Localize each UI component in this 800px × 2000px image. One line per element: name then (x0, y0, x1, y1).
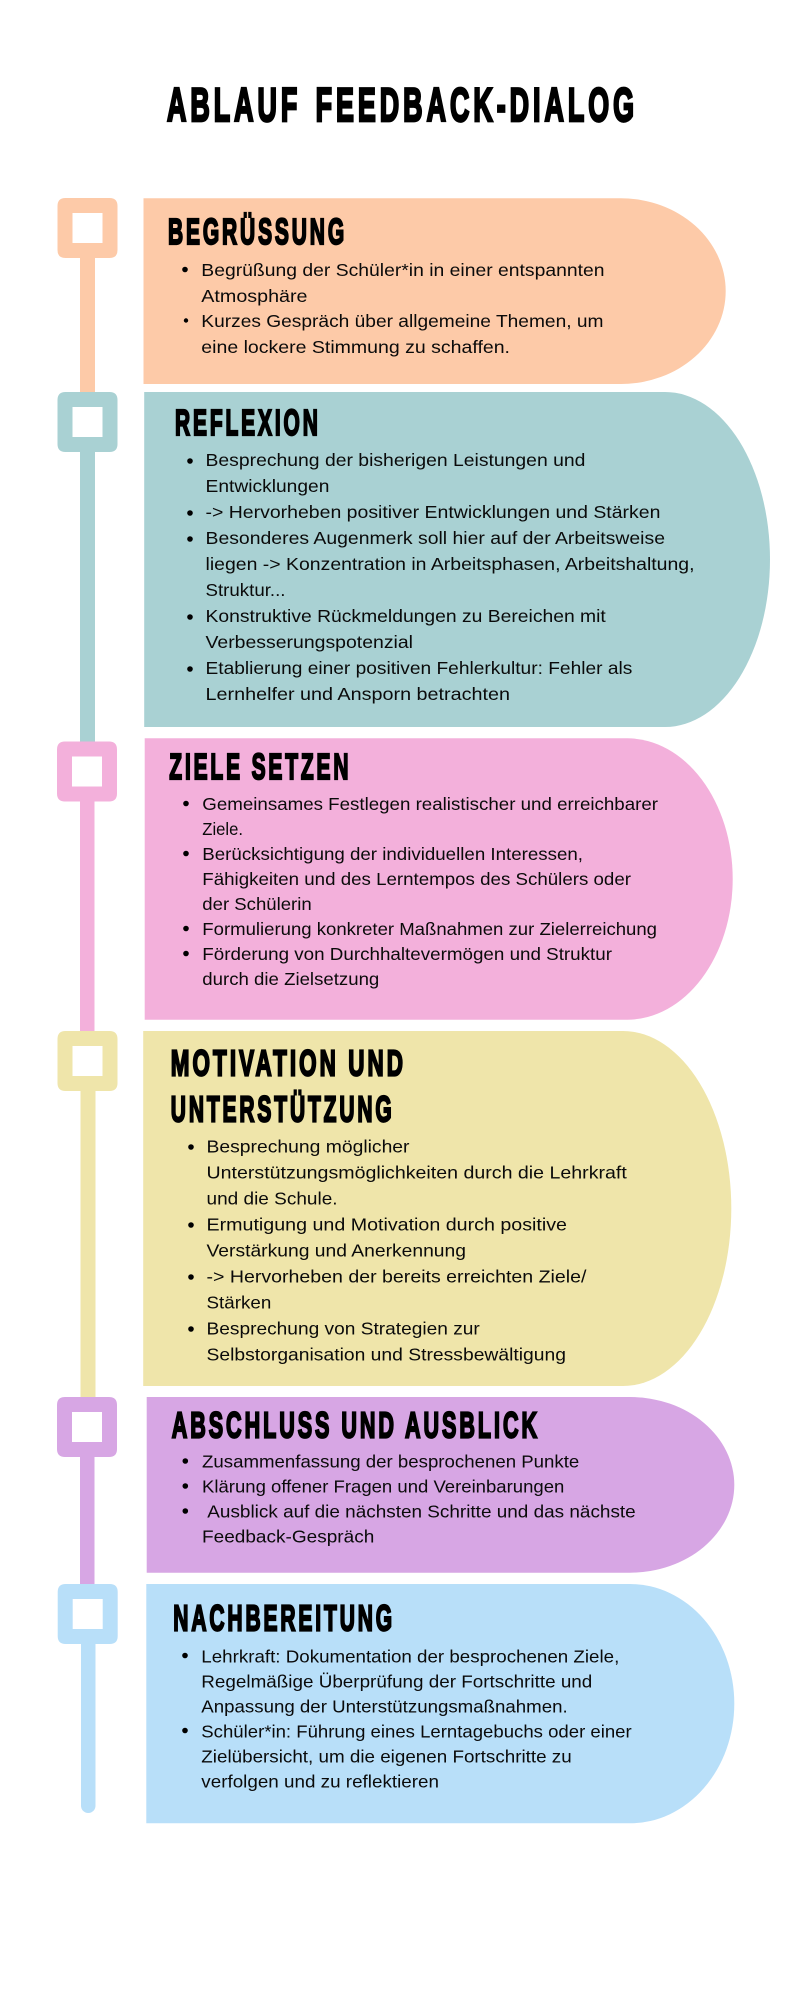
bullet list: Verbesserungspotenzial (206, 632, 413, 652)
bullet list: Entwicklungen (206, 476, 329, 496)
bullet list (188, 1136, 627, 1364)
panel shape (144, 392, 770, 727)
heading: ZIELE SETZEN (169, 746, 351, 787)
bullet list: Ausblick auf die nächsten Schritte und das nächste (207, 1501, 636, 1521)
bullet list: Ziele. (202, 819, 243, 839)
panel: Begrüßung (144, 198, 726, 384)
bullet list: Regelmäßige Überprüfung der Fortschritte und (201, 1671, 592, 1691)
bullet list: Besprechung möglicher (206, 1136, 410, 1156)
panel shape (144, 198, 726, 384)
bullet list: und die Schule. (206, 1188, 338, 1208)
bullet list: durch die Zielsetzung (202, 969, 379, 989)
bullet list: Berücksichtigung der individuellen Interessen, (202, 844, 583, 864)
bullet list (182, 1451, 636, 1546)
bullet list: Konstruktive Rückmeldungen zu Bereichen mit (206, 606, 606, 626)
panel: Nachbereitung (146, 1584, 734, 1823)
bullet list: Verstärkung und Anerkennung (206, 1240, 466, 1260)
bullet list: -> Hervorheben positiver Entwicklungen und Stärken (206, 502, 660, 522)
panel: Abschluss und Ausblick (147, 1397, 734, 1573)
bullet list: Schüler*in: Führung eines Lerntagebuchs oder einer (201, 1721, 632, 1741)
timeline marker: Motivation und Unterstützung (58, 1031, 118, 1401)
panel shape (146, 1584, 734, 1823)
bullet list: eine lockere Stimmung zu schaffen. (201, 337, 510, 357)
bullet list: Feedback-Gespräch (202, 1526, 374, 1546)
bullet list: Ermutigung und Motivation durch positive (206, 1214, 567, 1234)
heading: ABSCHLUSS UND AUSBLICK (172, 1404, 540, 1445)
bullet list: Besprechung der bisherigen Leistungen und (206, 450, 585, 470)
bullet list: der Schülerin (202, 894, 312, 914)
bullet list: Atmosphäre (201, 286, 308, 306)
panel shape (143, 1031, 731, 1386)
bullet list: Struktur... (206, 580, 286, 600)
bullet list: Unterstützungsmöglichkeiten durch die Lehrkraft (206, 1162, 627, 1182)
panel shape (145, 738, 733, 1020)
bullet list: Zielübersicht, um die eigenen Fortschritte zu (201, 1746, 572, 1766)
bullet list: Etablierung einer positiven Fehlerkultur: Fehler als (206, 658, 633, 678)
bullet list: Gemeinsames Festlegen realistischer und erreichbarer (202, 794, 658, 814)
timeline marker: Reflexion (58, 392, 118, 744)
bullet list: Fähigkeiten und des Lerntempos des Schülers oder (202, 869, 631, 889)
bullet list: liegen -> Konzentration in Arbeitsphasen, Arbeitshaltung, (206, 554, 694, 574)
timeline marker: Begrüßung (58, 198, 118, 395)
bullet list: verfolgen und zu reflektieren (201, 1771, 439, 1791)
timeline marker: Nachbereitung (58, 1584, 118, 1813)
timeline marker: Abschluss und Ausblick (57, 1397, 117, 1588)
heading: BEGRÜSSUNG (168, 211, 347, 252)
heading: UNTERSTÜTZUNG (171, 1089, 395, 1130)
bullet list (182, 260, 604, 357)
bullet list: Zusammenfassung der besprochenen Punkte (202, 1451, 579, 1471)
bullet list: Lehrkraft: Dokumentation der besprochenen Ziele, (201, 1646, 619, 1666)
bullet list: Formulierung konkreter Maßnahmen zur Zielerreichung (202, 919, 657, 939)
bullet list (187, 450, 694, 704)
panel: Ziele setzen (145, 738, 733, 1020)
heading: NACHBEREITUNG (173, 1598, 395, 1639)
bullet list: Besonderes Augenmerk soll hier auf der Arbeitsweise (206, 528, 665, 548)
bullet list: -> Hervorheben der bereits erreichten Ziele/ (206, 1266, 587, 1286)
bullet list (183, 794, 658, 989)
timeline marker: Ziele setzen (57, 742, 117, 1035)
bullet list: Förderung von Durchhaltevermögen und Struktur (202, 944, 612, 964)
heading (171, 1043, 406, 1130)
panel: Reflexion (144, 392, 770, 727)
bullet list: Begrüßung der Schüler*in in einer entspannten (201, 260, 605, 280)
bullet list: Anpassung der Unterstützungsmaßnahmen. (201, 1696, 568, 1716)
panel: Motivation und Unterstützung (143, 1031, 731, 1386)
panel shape (147, 1397, 734, 1573)
heading: REFLEXION (175, 402, 321, 443)
bullet list: Klärung offener Fragen und Vereinbarungen (202, 1476, 564, 1496)
bullet list: Selbstorganisation und Stressbewältigung (206, 1344, 566, 1364)
bullet list: Besprechung von Strategien zur (206, 1318, 480, 1338)
bullet list (182, 1646, 632, 1791)
bullet list: Lernhelfer und Ansporn betrachten (206, 684, 510, 704)
bullet list: Stärken (206, 1292, 271, 1312)
heading: MOTIVATION UND (171, 1043, 406, 1084)
bullet list: Kurzes Gespräch über allgemeine Themen, um (201, 311, 604, 331)
